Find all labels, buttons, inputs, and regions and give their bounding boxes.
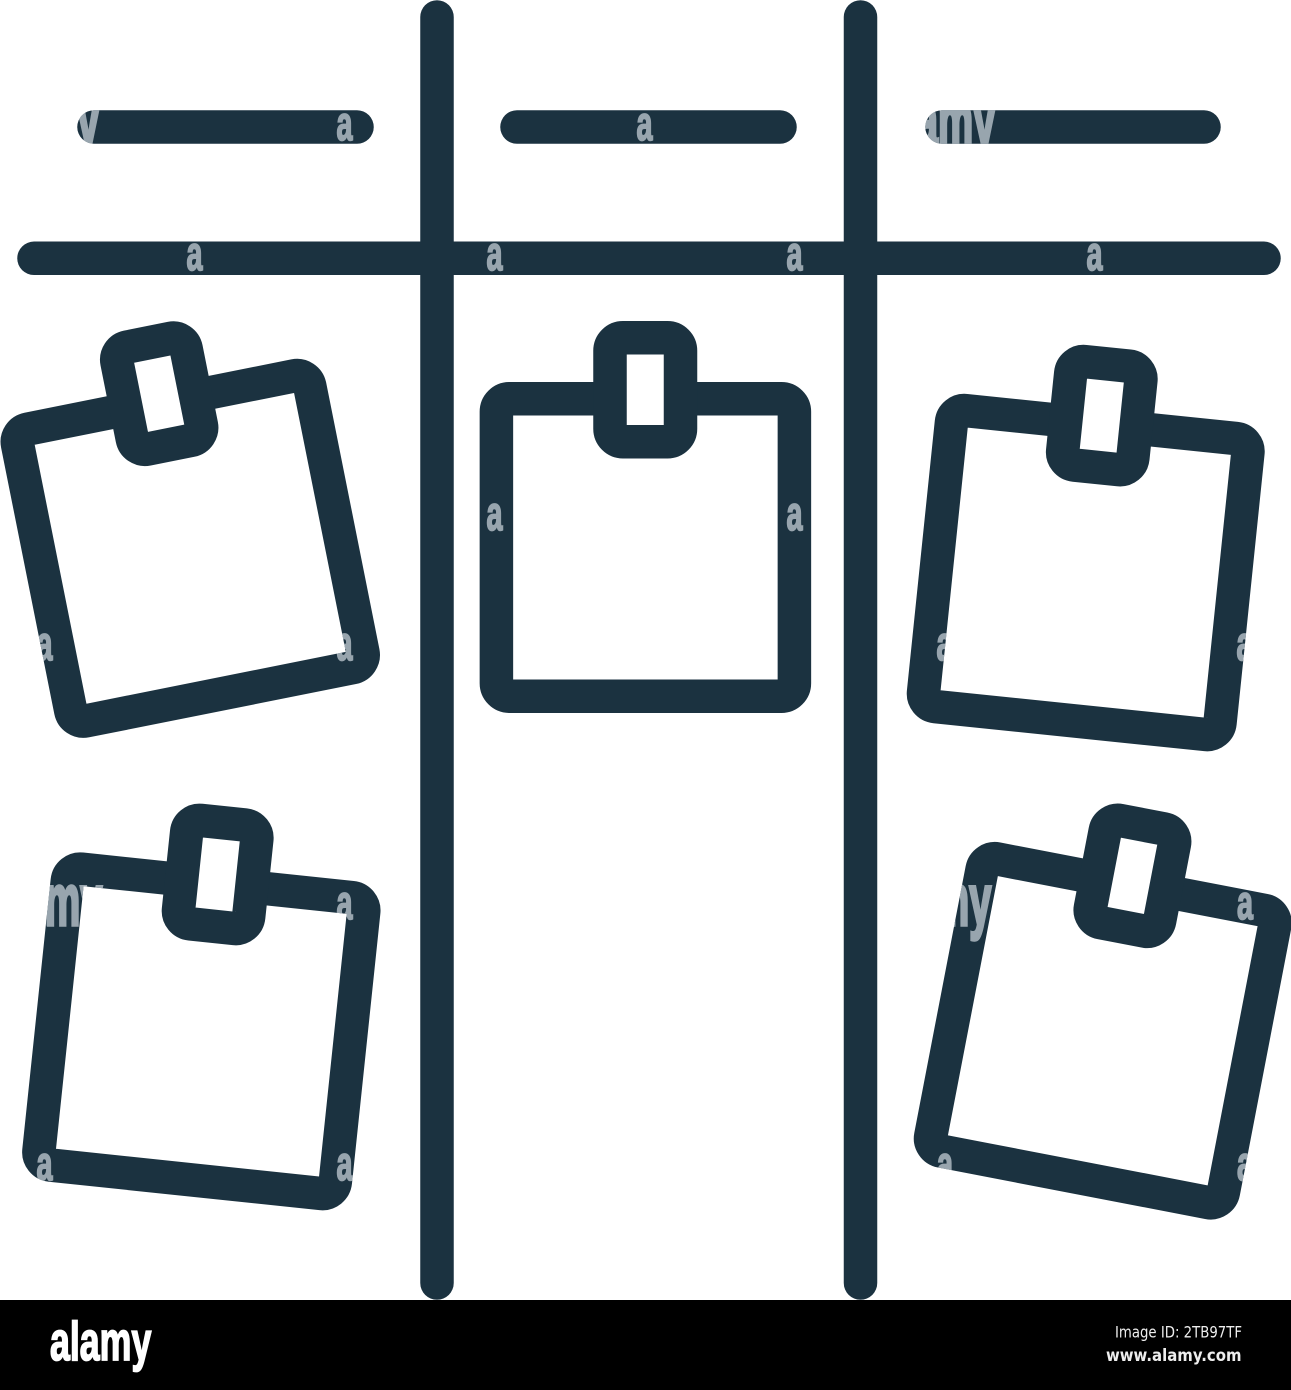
watermark words: alamy: [883, 81, 995, 161]
watermark marks: a: [36, 1138, 53, 1191]
watermark marks: a: [36, 618, 53, 671]
watermark words: alamy: [879, 861, 991, 941]
watermark marks: a: [486, 488, 503, 541]
sticky note: column 2: [496, 338, 794, 696]
watermark marks: a: [786, 228, 803, 281]
watermark marks: a: [1237, 1138, 1254, 1191]
watermark marks: a: [486, 228, 503, 281]
website: www.alamy.com: [1106, 1346, 1242, 1366]
watermark marks: a: [786, 488, 803, 541]
watermark marks: a: [1236, 618, 1253, 671]
image id: Image ID: 2TB97TF: [1115, 1322, 1242, 1342]
footer bar: [0, 1300, 1291, 1390]
watermark marks: a: [1086, 228, 1103, 281]
watermark marks: [36, 98, 1254, 1191]
watermark words: [0, 81, 995, 941]
watermark marks: a: [336, 618, 353, 671]
sticky note: column 3 bottom: [928, 797, 1289, 1205]
column heading 2: [517, 110, 780, 144]
watermark marks: a: [186, 228, 203, 281]
column headings: [94, 110, 1204, 144]
sticky note: column 3 top: [922, 349, 1255, 736]
watermark marks: a: [1237, 877, 1254, 930]
watermark marks: a: [336, 98, 353, 151]
sticky note: column 1 top: [3, 313, 366, 723]
watermark marks: a: [336, 1138, 353, 1191]
footer logo: alamy: [50, 1310, 152, 1372]
watermark marks: a: [336, 877, 353, 930]
column heading 3: [942, 110, 1204, 144]
column heading 1: [94, 110, 357, 144]
watermark marks: a: [636, 98, 653, 151]
header rule: [34, 242, 1264, 275]
column divider right: [844, 17, 877, 1283]
watermark marks: a: [936, 618, 953, 671]
column divider left: [420, 17, 454, 1283]
watermark marks: a: [937, 1138, 954, 1191]
sticky note: column 1 bottom: [38, 807, 371, 1195]
